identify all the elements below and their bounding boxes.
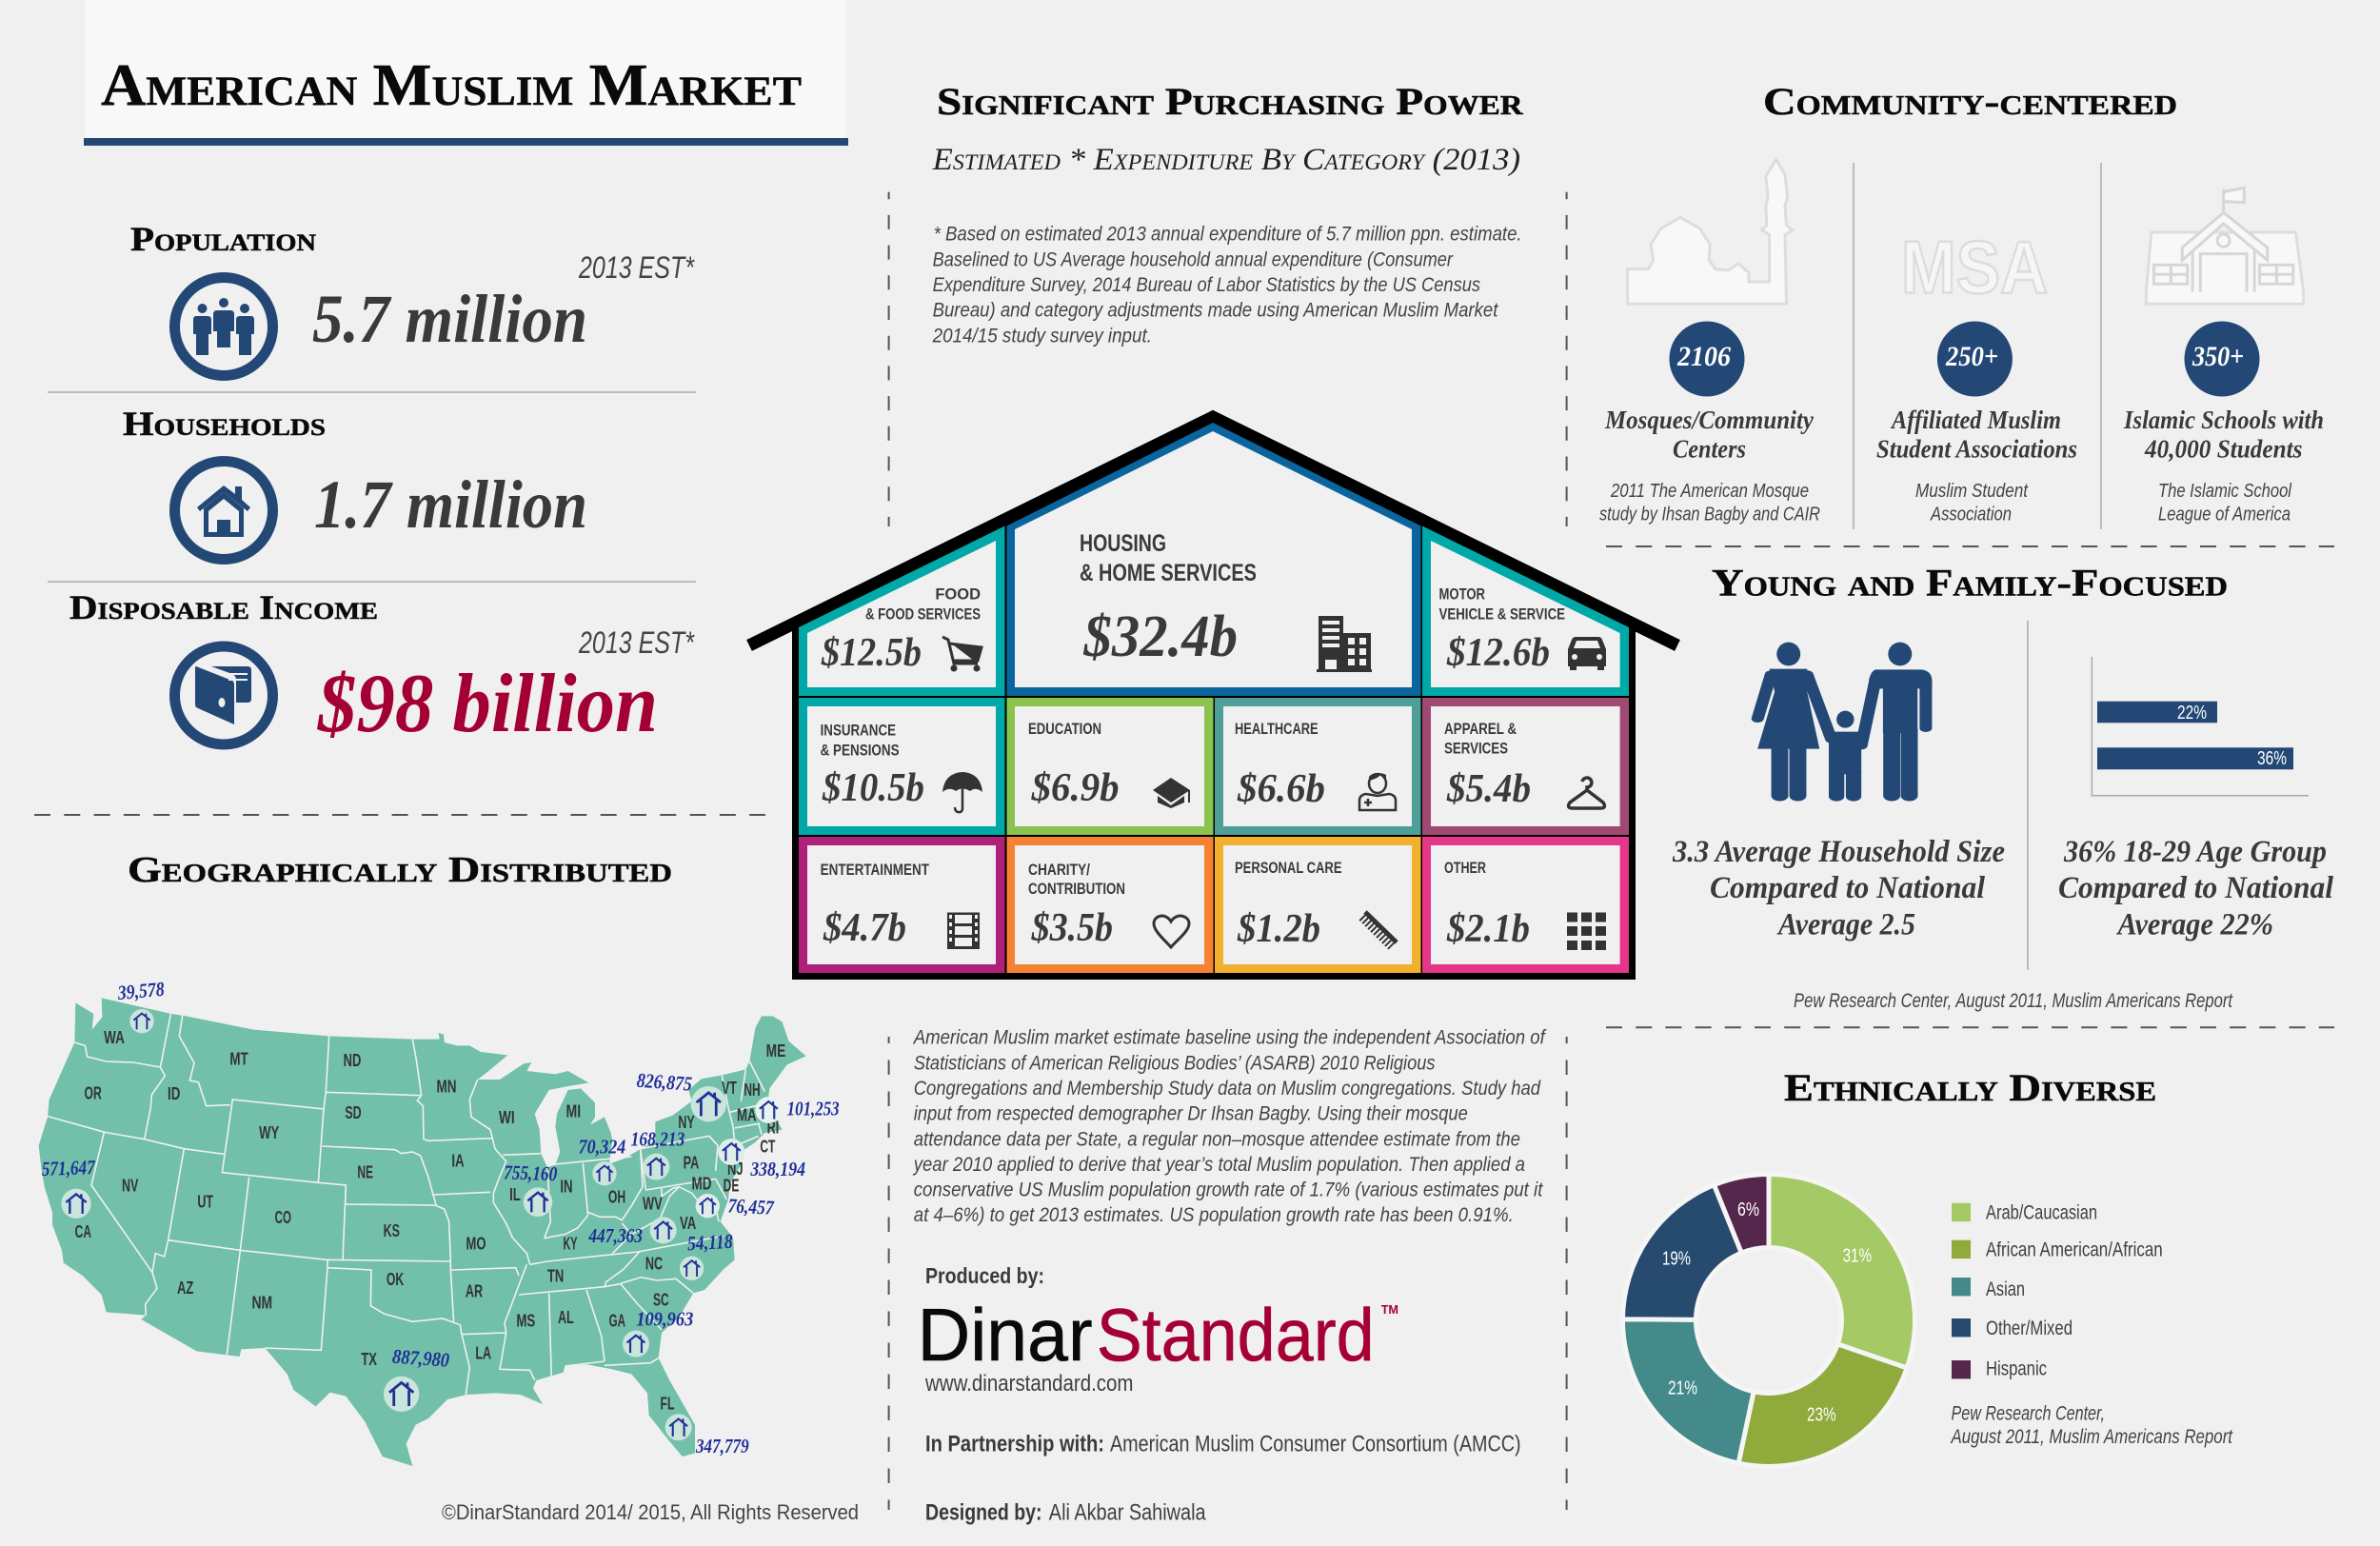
panel: population	[130, 220, 695, 375]
title	[84, 0, 848, 146]
stat: mosques	[1599, 322, 1820, 525]
logo: DinarStandard: TM	[1381, 1302, 1398, 1317]
cell: entertainment: $4.7b	[823, 906, 906, 950]
stat: islamic schools: The Islamic School	[2158, 481, 2291, 502]
state abbreviations: NH	[744, 1080, 761, 1100]
caption: household size: Compared to National	[1710, 871, 1986, 905]
heading: population: Population	[130, 220, 316, 258]
state abbreviations: FL	[660, 1394, 674, 1414]
cell: motor vehicle: MOTOR	[1439, 586, 1485, 604]
state abbreviations: AL	[558, 1307, 574, 1327]
state abbreviations: SC	[653, 1290, 669, 1310]
stat: student associations: Muslim Student	[1915, 481, 2029, 502]
caption: household size: Average 2.5	[1776, 908, 1915, 942]
caption: household size: 3.3 Average Household Size	[1672, 835, 2005, 869]
state abbreviations: UT	[197, 1191, 213, 1211]
cell: personal care	[1215, 837, 1420, 973]
legend: Arab/Caucasian	[1986, 1201, 2097, 1223]
partnership	[925, 1431, 1521, 1457]
population numbers: 755,160	[504, 1160, 558, 1185]
state abbreviations: WV	[643, 1194, 663, 1214]
logo: DinarStandard	[918, 1293, 1398, 1377]
cell: food: FOOD	[935, 586, 981, 604]
note: 2013 estimate: 2013 EST*	[578, 625, 695, 660]
icon: wallet	[175, 646, 272, 744]
subheading: estimated expenditure by category: Estimated * Expenditure By Category (2013)	[932, 143, 1520, 177]
state abbreviations: IL	[509, 1184, 521, 1204]
legend: African American/African	[1986, 1239, 2163, 1260]
heading: community-centered: Community-centered	[1763, 80, 2177, 123]
state abbreviations: OR	[84, 1082, 102, 1102]
state abbreviations: CT	[760, 1137, 775, 1157]
cell: insurance: & PENSIONS	[821, 743, 900, 760]
state abbreviations: MO	[466, 1233, 486, 1253]
produced by: Produced by:	[925, 1263, 1044, 1288]
state abbreviations: MS	[516, 1310, 535, 1330]
population numbers: 109,963	[636, 1308, 694, 1331]
methodology paragraph	[912, 1027, 1547, 1226]
stat: student associations: 250+	[1945, 341, 1998, 372]
methodology paragraph: at 4–6%) to get 2013 estimates. US population growth rate has been 0.91%.	[914, 1204, 1514, 1226]
state abbreviations: PA	[684, 1152, 699, 1172]
cell: education: $6.9b	[1031, 766, 1120, 810]
house markers	[61, 1009, 782, 1440]
footnote text: * Based on estimated 2013 annual expenditure of 5.7 million ppn. estimate.	[934, 224, 1522, 246]
caption: age group: 36% 18-29 Age Group	[2063, 835, 2327, 869]
stat: mosques: 2106	[1676, 341, 1731, 372]
population numbers: 887,980	[391, 1345, 450, 1372]
methodology paragraph: American Muslim market estimate baseline using the independent Association of	[912, 1027, 1547, 1049]
heading: disposable income: Disposable Income	[69, 588, 378, 626]
house chart: expenditure by category	[749, 417, 1677, 980]
partnership: American Muslim Consumer Consortium (AMCC)	[1110, 1431, 1521, 1457]
state abbreviations: KY	[563, 1234, 577, 1254]
population numbers: 571,647	[41, 1156, 96, 1180]
state abbreviations: VA	[680, 1213, 696, 1233]
methodology paragraph: input from respected demographer Dr Ihsan Bagby. Using their mosque	[914, 1103, 1468, 1125]
state abbreviations: MI	[565, 1100, 581, 1120]
state abbreviations: CO	[275, 1207, 291, 1227]
stat: student associations: Student Associations	[1876, 435, 2077, 464]
state abbreviations: NM	[251, 1292, 272, 1312]
icon: family	[1757, 643, 1932, 797]
population numbers: 168,213	[631, 1127, 685, 1150]
bar chart: age group: 22%	[2177, 703, 2207, 723]
panel: young and family-focused	[1672, 562, 2334, 1012]
cell: food	[799, 525, 1005, 696]
caption: age group: Compared to National	[2058, 871, 2334, 905]
stat: mosques: 2011 The American Mosque	[1610, 481, 1809, 502]
source: pew: August 2011, Muslim Americans Report	[1950, 1426, 2233, 1448]
icon: school	[2146, 188, 2304, 304]
caption: age group: Average 22%	[2116, 908, 2273, 942]
population numbers: 826,875	[636, 1069, 693, 1096]
donut labels	[1662, 1199, 1872, 1426]
footnote text	[932, 224, 1522, 347]
population numbers	[41, 978, 840, 1457]
state abbreviations: KS	[384, 1220, 400, 1240]
state abbreviations: ID	[168, 1083, 180, 1103]
state abbreviations: NY	[678, 1112, 695, 1132]
caption: household size	[1672, 835, 2005, 942]
icon: MSA: MSA	[1901, 226, 2048, 309]
cell: apparel: SERVICES	[1444, 741, 1508, 758]
bar chart: age group	[2092, 657, 2309, 796]
logo: DinarStandard: Standard	[1097, 1293, 1375, 1377]
source: pew: Pew Research Center,	[1952, 1402, 2105, 1424]
state abbreviations: IN	[560, 1177, 573, 1197]
cell: charity: $3.5b	[1031, 906, 1113, 950]
state abbreviations: GA	[609, 1310, 625, 1330]
cell: motor vehicle: VEHICLE & SERVICE	[1439, 605, 1565, 623]
heading: significant purchasing power: Significant Purchasing Power	[937, 80, 1524, 123]
caption: age group	[2058, 835, 2334, 942]
designer	[925, 1499, 1206, 1525]
value: $98 billion: $98 billion	[316, 658, 658, 750]
panel: households	[123, 405, 587, 560]
state abbreviations: VT	[722, 1078, 737, 1098]
state abbreviations: IA	[451, 1151, 465, 1171]
state abbreviations: AZ	[177, 1278, 193, 1298]
stat: student associations	[1876, 322, 2077, 525]
cell: food: $12.5b	[821, 631, 922, 675]
heading: young and family-focused: Young and Family-Focused	[1712, 562, 2228, 605]
cell: charity	[1007, 837, 1213, 973]
heading: households: Households	[123, 405, 326, 443]
state abbreviations: NJ	[727, 1159, 744, 1179]
cell: healthcare: HEALTHCARE	[1235, 721, 1319, 738]
cell: housing	[1007, 423, 1420, 696]
footnote text: Bureau) and category adjustments made using American Muslim Market	[933, 300, 1498, 322]
methodology paragraph: conservative US Muslim population growth rate of 1.7% (various estimates put it	[914, 1179, 1543, 1201]
state abbreviations	[75, 1027, 785, 1414]
bar chart: age group: 36%	[2257, 748, 2287, 769]
population numbers: 347,779	[695, 1435, 749, 1457]
logo: DinarStandard: Dinar	[918, 1293, 1093, 1377]
state abbreviations: TN	[547, 1266, 564, 1286]
copyright: ©DinarStandard 2014/ 2015, All Rights Reserved	[442, 1500, 859, 1524]
state abbreviations: TX	[361, 1349, 378, 1369]
cell: healthcare	[1215, 698, 1420, 835]
donut labels: 6%	[1737, 1199, 1759, 1220]
heading: geographically distributed: Geographically Distributed	[128, 850, 672, 890]
cell: housing: HOUSING	[1080, 530, 1166, 557]
state abbreviations: RI	[767, 1118, 779, 1138]
state abbreviations: AR	[466, 1281, 483, 1301]
map: muslim population by US state	[39, 978, 840, 1466]
source: pew	[1950, 1402, 2233, 1448]
donut labels: 21%	[1668, 1378, 1697, 1399]
state abbreviations: NE	[357, 1161, 373, 1181]
legend: Asian	[1986, 1278, 2025, 1300]
partnership: In Partnership with:	[925, 1431, 1104, 1457]
stat: islamic schools: Islamic Schools with	[2123, 406, 2324, 434]
legend: Hispanic	[1986, 1358, 2047, 1380]
cell: other: OTHER	[1444, 860, 1486, 877]
heading: ethnically diverse: Ethnically Diverse	[1784, 1066, 2156, 1109]
population numbers: 39,578	[116, 978, 166, 1004]
state abbreviations: MN	[436, 1077, 456, 1097]
cell: entertainment	[799, 837, 1005, 973]
state abbreviations: CA	[75, 1221, 91, 1241]
cell: charity: CONTRIBUTION	[1028, 881, 1125, 898]
cell: healthcare: $6.6b	[1237, 767, 1325, 811]
state abbreviations: DE	[724, 1176, 739, 1196]
state abbreviations: ME	[766, 1041, 785, 1060]
footnote text: Baselined to US Average household annual expenditure (Consumer	[933, 248, 1454, 270]
designer: Designed by:	[925, 1499, 1041, 1525]
stat: mosques: study by Ihsan Bagby and CAIR	[1599, 505, 1820, 525]
state abbreviations: ND	[344, 1050, 361, 1070]
cell: housing: $32.4b	[1083, 605, 1238, 669]
icon: people	[175, 278, 272, 375]
cell: motor vehicle	[1422, 525, 1629, 696]
donut labels: 31%	[1843, 1245, 1872, 1266]
cell: motor vehicle: $12.6b	[1446, 631, 1550, 675]
stat: mosques: Mosques/Community	[1604, 406, 1815, 434]
stat: islamic schools: 350+	[2192, 341, 2244, 372]
value: 1.7 million: 1.7 million	[314, 466, 587, 543]
source: pew: Pew Research Center, August 2011, Muslim Americans Report	[1794, 990, 2233, 1012]
state abbreviations: SD	[345, 1102, 362, 1122]
donut chart	[1622, 1175, 1914, 1466]
state abbreviations: NC	[645, 1253, 663, 1273]
state abbreviations: LA	[475, 1342, 491, 1362]
methodology paragraph: Statisticians of American Religious Bodies’ (ASARB) 2010 Religious	[914, 1052, 1436, 1074]
state abbreviations: MT	[229, 1048, 248, 1068]
state abbreviations: MA	[737, 1104, 757, 1124]
cell: charity: CHARITY/	[1028, 862, 1090, 879]
legend	[1952, 1201, 2163, 1380]
website: www.dinarstandard.com	[924, 1371, 1133, 1397]
stat: student associations: Affiliated Muslim	[1890, 406, 2061, 434]
state abbreviations: WI	[499, 1107, 515, 1127]
cell: apparel	[1422, 698, 1629, 835]
cell: insurance: INSURANCE	[821, 723, 896, 740]
panel: disposable income	[69, 588, 695, 750]
cell: insurance: $10.5b	[822, 766, 924, 810]
cell: entertainment: ENTERTAINMENT	[821, 862, 929, 879]
state abbreviations: WY	[259, 1122, 279, 1142]
title: American Muslim Market	[101, 53, 802, 118]
cell: other: $2.1b	[1446, 907, 1530, 951]
population numbers: 70,324	[579, 1136, 626, 1159]
cell: education: EDUCATION	[1028, 721, 1101, 738]
icon: mosque	[1628, 159, 1793, 304]
methodology paragraph: attendance data per State, a regular non–mosque attendee estimate from the	[914, 1128, 1520, 1150]
donut labels: 19%	[1662, 1249, 1691, 1270]
value: 5.7 million: 5.7 million	[312, 281, 587, 357]
state abbreviations: OK	[387, 1269, 405, 1289]
note: 2013 estimate: 2013 EST*	[578, 250, 695, 285]
stat: mosques: Centers	[1673, 435, 1746, 464]
donut labels: 23%	[1807, 1405, 1836, 1426]
methodology paragraph: year 2010 applied to derive that year’s total Muslim population. Then applied a	[912, 1154, 1525, 1176]
designer: Ali Akbar Sahiwala	[1049, 1499, 1206, 1525]
population numbers: 101,253	[787, 1098, 840, 1120]
stat: islamic schools: 40,000 Students	[2144, 435, 2302, 464]
cell: personal care: PERSONAL CARE	[1235, 860, 1342, 877]
panel: community-centered	[1599, 80, 2324, 529]
cell: other	[1422, 837, 1629, 973]
footnote text: Expenditure Survey, 2014 Bureau of Labor Statistics by the US Census	[933, 274, 1480, 296]
cell: apparel: $5.4b	[1446, 767, 1531, 811]
cell: apparel: APPAREL &	[1444, 721, 1517, 738]
population numbers: 338,194	[749, 1158, 805, 1180]
stat: student associations: Association	[1930, 505, 2012, 525]
legend: Other/Mixed	[1986, 1318, 2073, 1339]
state abbreviations: NV	[122, 1176, 139, 1196]
state abbreviations: MD	[691, 1173, 711, 1193]
methodology paragraph: Congregations and Membership Study data on Muslim congregations. Study had	[914, 1078, 1541, 1100]
credits	[918, 1263, 1521, 1525]
stat: islamic schools	[2123, 322, 2324, 525]
cell: education	[1007, 698, 1213, 835]
stat: islamic schools: League of America	[2158, 505, 2291, 525]
state abbreviations: OH	[608, 1186, 625, 1206]
panel: ethnically diverse	[1622, 1066, 2233, 1466]
icon: house	[175, 461, 272, 560]
population numbers: 54,118	[686, 1230, 733, 1255]
state abbreviations: WA	[104, 1027, 125, 1047]
footnote text: 2014/15 study survey input.	[932, 325, 1152, 347]
cell: food: & FOOD SERVICES	[865, 605, 981, 623]
cell: insurance	[799, 698, 1005, 835]
cell: housing: & HOME SERVICES	[1080, 560, 1257, 586]
cell: personal care: $1.2b	[1237, 907, 1320, 951]
population numbers: 447,363	[588, 1224, 643, 1247]
population numbers: 76,457	[727, 1194, 775, 1219]
